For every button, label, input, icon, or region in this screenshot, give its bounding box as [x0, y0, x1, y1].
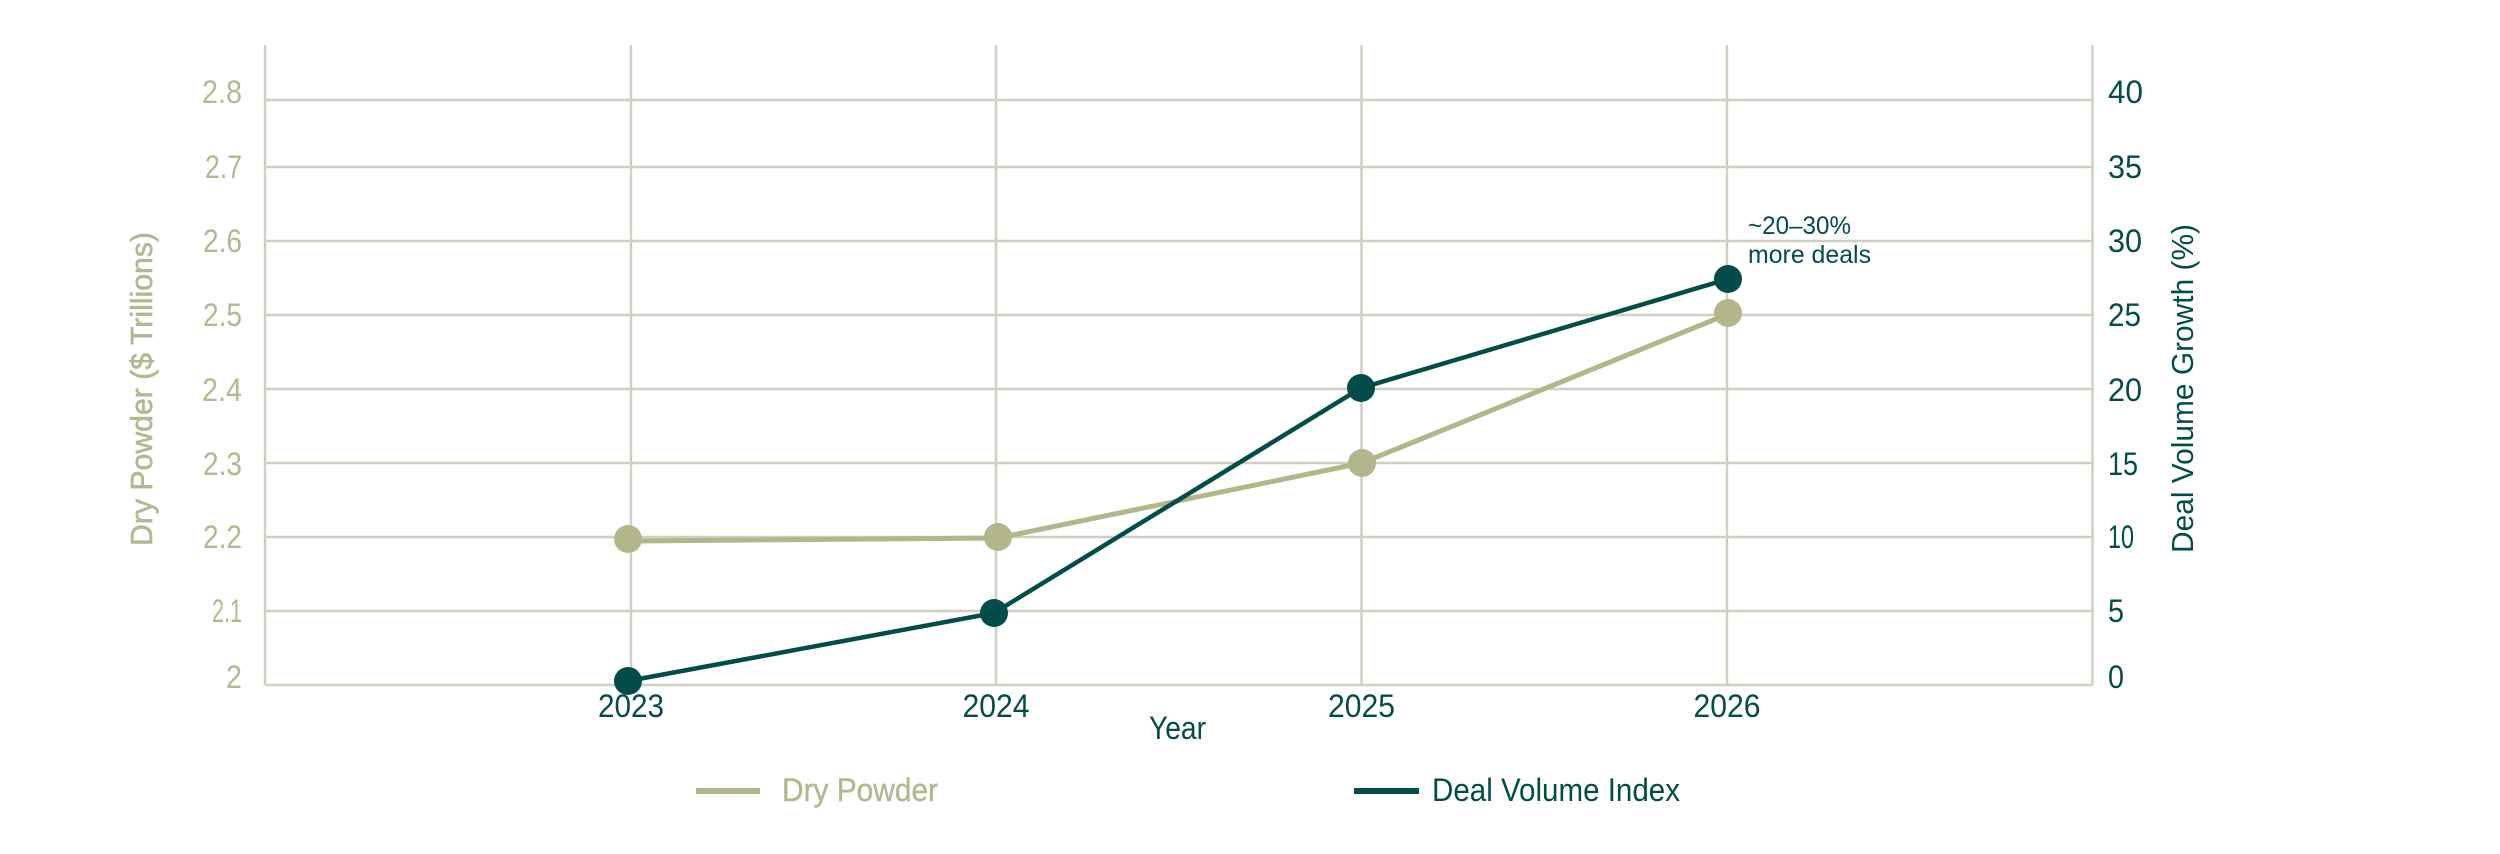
series: dry powder	[614, 299, 1742, 553]
right axis tick labels: 10	[2108, 519, 2134, 555]
left axis tick labels: 2.7	[205, 149, 242, 185]
callout: more deals: ~20–30%	[1748, 212, 1851, 240]
x axis year labels: 2026	[1694, 688, 1760, 724]
callout: more deals	[1748, 212, 1871, 269]
x axis year labels: 2024	[962, 688, 1030, 724]
callout: more deals: more deals	[1748, 241, 1871, 269]
legend: dry powder	[696, 772, 938, 808]
x axis year labels: 2023	[598, 688, 664, 724]
left axis tick labels: 2.4	[202, 372, 242, 408]
left axis tick labels: 2.6	[203, 223, 242, 259]
legend: deal volume index: Deal Volume Index	[1432, 772, 1680, 808]
left axis tick labels: 2.1	[212, 593, 242, 629]
series: deal volume index	[614, 265, 1742, 695]
x axis title: Year	[1149, 710, 1206, 746]
left axis tick labels: 2.5	[203, 297, 242, 333]
left axis tick labels: 2.8	[202, 74, 242, 110]
right axis tick labels	[2108, 74, 2143, 695]
left axis tick labels	[202, 74, 242, 695]
right axis tick labels: 0	[2108, 659, 2124, 695]
right axis tick labels: 5	[2108, 593, 2124, 629]
right axis tick labels: 25	[2108, 297, 2141, 333]
right axis tick labels: 20	[2108, 372, 2142, 408]
left axis tick labels: 2	[226, 659, 242, 695]
right axis tick labels: 15	[2108, 446, 2138, 482]
left axis tick labels: 2.2	[203, 519, 242, 555]
left axis title: Dry Powder ($ Trillions)	[124, 232, 159, 546]
left axis tick labels: 2.3	[203, 446, 242, 482]
right axis title: Deal Volume Growth (%)	[2165, 224, 2200, 553]
legend: dry powder: Dry Powder	[782, 772, 938, 808]
x axis year labels: 2025	[1328, 688, 1395, 724]
x axis year labels	[598, 688, 1760, 724]
right axis tick labels: 30	[2108, 223, 2142, 259]
right axis tick labels: 35	[2108, 149, 2142, 185]
right axis tick labels: 40	[2108, 74, 2143, 110]
